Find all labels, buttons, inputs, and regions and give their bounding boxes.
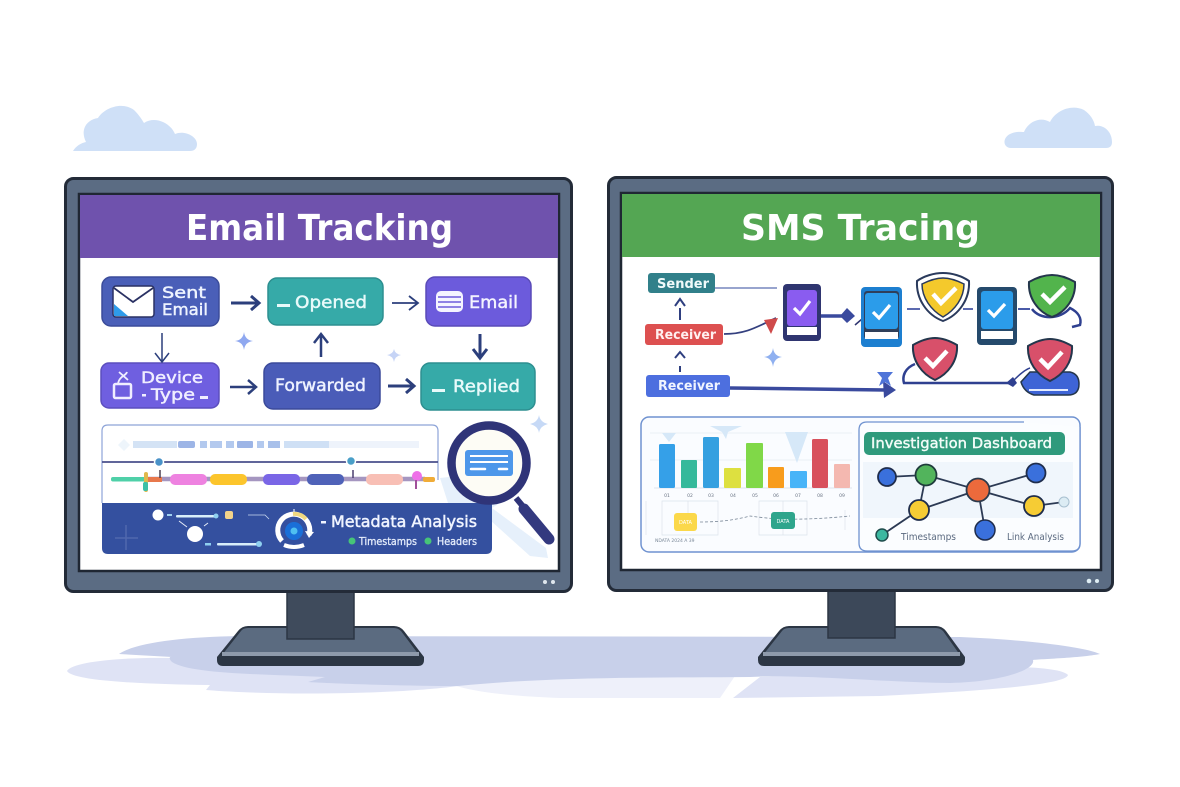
label: link analysis: Link Analysis <box>1007 532 1064 543</box>
bar chart: 08 <box>817 493 823 499</box>
header: sms tracing <box>622 194 1100 257</box>
heading: investigation dashboard: Investigation Dashboard <box>871 436 1052 452</box>
box: sent email: Email <box>162 300 208 319</box>
icon: shield red on base <box>1014 339 1079 395</box>
icon: phone blue <box>861 287 902 347</box>
icon: phone dark <box>977 287 1017 345</box>
monitor stand neck <box>287 590 354 639</box>
box: replied: Replied <box>453 377 520 397</box>
magnifier soft shadow <box>440 476 548 558</box>
bar chart <box>650 426 852 499</box>
icon: shield red <box>913 338 957 380</box>
sparkle <box>764 348 782 367</box>
monitor: email tracking <box>66 178 572 666</box>
bar chart: 09 <box>839 493 845 499</box>
box: receiver red <box>645 324 723 345</box>
bar chart: 01 <box>664 493 670 499</box>
legend: headers <box>424 535 477 548</box>
line chart with chips <box>646 501 850 544</box>
metadata analysis bar <box>102 503 492 554</box>
box: email <box>426 277 531 326</box>
heading: metadata analysis: Metadata Analysis <box>331 512 477 531</box>
connector: green shield curl <box>1032 308 1081 327</box>
label: timestamps: Timestamps <box>900 532 956 543</box>
header: email tracking <box>80 195 558 258</box>
dash <box>321 521 326 524</box>
arrow: sent to device <box>155 333 169 362</box>
box: sender: Sender <box>657 277 710 292</box>
connector <box>907 308 920 310</box>
monitor stand base <box>758 626 965 666</box>
bar chart: 06 <box>773 493 779 499</box>
arrow: sent to opened <box>231 296 259 310</box>
monitor stand neck <box>828 590 895 638</box>
bar chart: 07 <box>795 493 801 499</box>
box: replied <box>421 363 535 410</box>
heading: investigation dashboard <box>864 432 1065 455</box>
flow: email states <box>101 277 548 433</box>
legend: headers: Headers <box>437 535 477 548</box>
legend: timestamps: Timestamps <box>358 535 417 548</box>
arrow: lower receiver to receiver <box>675 352 685 372</box>
power buttons <box>1087 579 1099 583</box>
network graph <box>876 464 1069 541</box>
arrow: email to replied <box>473 334 487 358</box>
box: receiver red: Receiver <box>655 328 717 343</box>
connector: phone to phone <box>821 308 862 325</box>
timeline line <box>102 456 438 466</box>
monitor stand base <box>217 626 424 666</box>
progress segments <box>118 439 419 451</box>
box: sent email: Sent <box>162 283 206 302</box>
sparkle <box>235 332 253 350</box>
screen <box>621 193 1101 570</box>
sparkle <box>530 415 548 433</box>
arrow: receiver to sender <box>675 299 685 320</box>
trace flow diagram <box>645 273 1081 398</box>
connector <box>1018 308 1030 310</box>
connector: receiver to phone <box>724 318 778 334</box>
arrow: receiver to shields <box>730 381 896 398</box>
box: forwarded <box>264 363 380 409</box>
icon: star <box>877 372 893 386</box>
sparkle <box>387 349 401 362</box>
box: opened: Opened <box>295 293 367 313</box>
line chart with chips: DATA <box>777 519 790 525</box>
monitor: sms tracing <box>608 178 1112 666</box>
gauge icon <box>278 509 314 547</box>
cloud left <box>73 106 197 151</box>
cloud right <box>1004 108 1112 148</box>
connector: sender to phone <box>715 287 777 289</box>
arrow: opened to email <box>392 296 418 310</box>
connector <box>963 308 973 310</box>
box: receiver blue: Receiver <box>658 379 721 394</box>
arrow: forwarded to replied <box>388 379 414 393</box>
timeline panel <box>102 425 438 503</box>
line chart with chips: NDATA 2024 A 39 <box>655 538 695 544</box>
box: opened <box>268 278 383 325</box>
event pills <box>111 470 435 492</box>
bar chart: 04 <box>730 493 736 499</box>
title: SMS Tracing <box>741 208 980 249</box>
box: sent email <box>102 277 219 326</box>
box: forwarded: Forwarded <box>275 376 366 395</box>
dashboard panel <box>641 417 1080 552</box>
icon: magnifying glass <box>452 426 549 539</box>
monitor bezel <box>608 178 1112 590</box>
investigation dashboard panel <box>859 422 1080 551</box>
line chart with chips: DATA <box>679 520 693 526</box>
box: device type <box>101 363 219 408</box>
box: receiver blue <box>646 375 730 397</box>
connector: lower shield link <box>903 364 1017 387</box>
icon: phone purple <box>783 284 821 341</box>
screen <box>79 194 559 571</box>
arrow: device to forwarded <box>230 380 256 394</box>
monitor bezel <box>66 178 572 592</box>
ground shadow <box>67 636 1100 698</box>
arrow: forwarded to opened <box>314 334 328 357</box>
bar chart: 02 <box>687 493 693 499</box>
box: device type: Device <box>141 368 203 387</box>
box: email: Email <box>469 293 518 313</box>
bar chart: 05 <box>752 493 758 499</box>
title: Email Tracking <box>186 208 453 249</box>
icon: shield yellow <box>917 273 969 321</box>
bar chart: 03 <box>708 493 714 499</box>
decorative control nodes <box>115 510 269 550</box>
box: sender <box>648 273 715 293</box>
box: device type: Type <box>150 385 195 404</box>
power buttons <box>543 580 555 584</box>
icon: shield green <box>1029 275 1075 317</box>
